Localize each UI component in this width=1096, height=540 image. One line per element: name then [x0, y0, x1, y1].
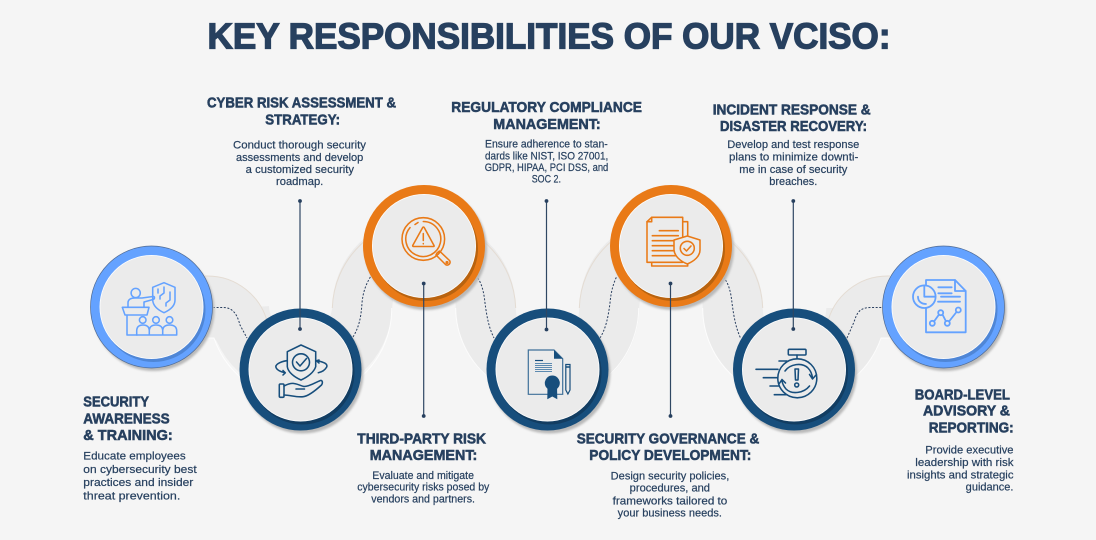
circle 2: cyber risk assessment — [240, 308, 364, 434]
text block: cyber risk assessment and strategy: CYBER RISK ASSESSMENT & — [207, 95, 396, 111]
text block: board-level advisory and reporting: REPORTING: — [929, 420, 1014, 436]
text block: security awareness and training — [83, 395, 197, 502]
text block: board-level advisory and reporting — [907, 387, 1014, 494]
text block: cyber risk assessment and strategy: roadmap. — [276, 176, 323, 188]
text block: security awareness and training: & TRAINING: — [83, 428, 173, 444]
text block: third-party risk management: Evaluate and mitigate — [372, 470, 474, 482]
leader line: incident response — [791, 199, 795, 331]
text block: third-party risk management: MANAGEMENT: — [370, 448, 477, 464]
text block: incident response and disaster recovery: INCIDENT RESPONSE & — [713, 102, 871, 118]
text block: incident response and disaster recovery: plans to minimize downti- — [729, 152, 859, 164]
text block: regulatory compliance management: REGULATORY COMPLIANCE — [451, 100, 642, 116]
text block: security awareness and training: threat prevention. — [83, 490, 180, 502]
text block: security awareness and training: practices and insider — [83, 477, 194, 489]
text block: third-party risk management: THIRD-PARTY RISK — [357, 431, 486, 447]
text block: board-level advisory and reporting: guidance. — [966, 482, 1014, 494]
text block: board-level advisory and reporting: insights and strategic — [907, 469, 1014, 481]
text block: cyber risk assessment and strategy: STRATEGY: — [265, 112, 340, 128]
text block: board-level advisory and reporting: Provide executive — [925, 445, 1014, 457]
icon: presenter with shield and audience — [122, 283, 177, 335]
text block: incident response and disaster recovery: me in case of security — [739, 164, 848, 176]
serpentine background band — [150, 219, 945, 377]
text block: incident response and disaster recovery: Develop and test response — [727, 139, 859, 151]
text block: security governance and policy development: SECURITY GOVERNANCE & — [577, 432, 760, 448]
text block: cyber risk assessment and strategy: Conduct thorough security — [233, 140, 367, 152]
text block: regulatory compliance management: SOC 2. — [532, 174, 561, 186]
text block: cyber risk assessment and strategy — [207, 95, 396, 188]
icon: policy document with shield — [647, 217, 700, 266]
icon: certificate document with seal and pen — [528, 350, 570, 399]
text block: incident response and disaster recovery: DISASTER RECOVERY: — [720, 119, 867, 135]
text block: third-party risk management — [357, 431, 490, 505]
text block: security governance and policy development: frameworks tailored to — [613, 495, 727, 507]
text block: third-party risk management: cybersecurity risks posed by — [357, 482, 490, 494]
text block: security awareness and training: Educate employees — [83, 451, 186, 463]
text block: regulatory compliance management: Ensure adherence to stan- — [485, 139, 608, 151]
icon: stopwatch with alert and speed lines — [756, 349, 817, 398]
leader line: regulatory compliance — [545, 199, 548, 331]
circle 3: third-party risk — [363, 185, 487, 310]
text block: regulatory compliance management: MANAGEMENT: — [493, 117, 601, 133]
text block: security governance and policy development: POLICY DEVELOPMENT: — [589, 448, 751, 464]
icon: magnifier with warning — [402, 218, 450, 265]
text block: third-party risk management: vendors and partners. — [371, 493, 475, 505]
text block: regulatory compliance management: dards like NIST, ISO 27001, — [485, 150, 608, 162]
text block: security governance and policy development — [577, 432, 760, 520]
circle 5: security governance — [610, 185, 734, 310]
text block: regulatory compliance management: GDPR, HIPAA, PCI DSS, and — [485, 162, 608, 174]
text block: incident response and disaster recovery: breaches. — [769, 176, 817, 188]
icon: report with pie and line chart — [913, 280, 966, 332]
text block: security awareness and training: SECURITY — [83, 395, 149, 411]
text block: security awareness and training: AWARENESS — [83, 411, 170, 427]
circle 6: incident response — [733, 308, 857, 434]
text block: board-level advisory and reporting: leadership with risk — [915, 457, 1014, 469]
text block: cyber risk assessment and strategy: assessments and develop — [236, 152, 363, 164]
circle 1: security awareness — [90, 246, 214, 371]
dashed connectors between circles — [213, 276, 882, 338]
title: KEY RESPONSIBILITIES OF OUR VCISO: — [208, 16, 890, 57]
text block: cyber risk assessment and strategy: a customized security — [246, 164, 355, 176]
text block: security governance and policy development: procedures, and — [630, 483, 710, 495]
text block: security governance and policy development: Design security policies, — [611, 470, 729, 482]
text block: security governance and policy development: your business needs. — [618, 508, 722, 520]
text block: security awareness and training: on cybersecurity best — [83, 464, 197, 476]
text block: board-level advisory and reporting: ADVISORY & — [923, 404, 1011, 420]
circle 7: board-level reporting — [882, 246, 1006, 371]
leader line: cyber risk — [298, 199, 302, 331]
circle 4: regulatory compliance — [486, 308, 610, 434]
text block: regulatory compliance management — [451, 100, 642, 186]
icon: shield in hand — [276, 345, 327, 397]
text block: incident response and disaster recovery — [713, 102, 871, 188]
leader line: third-party risk — [422, 282, 426, 418]
text block: board-level advisory and reporting: BOARD-LEVEL — [915, 387, 1010, 403]
leader line: security governance — [669, 282, 672, 418]
